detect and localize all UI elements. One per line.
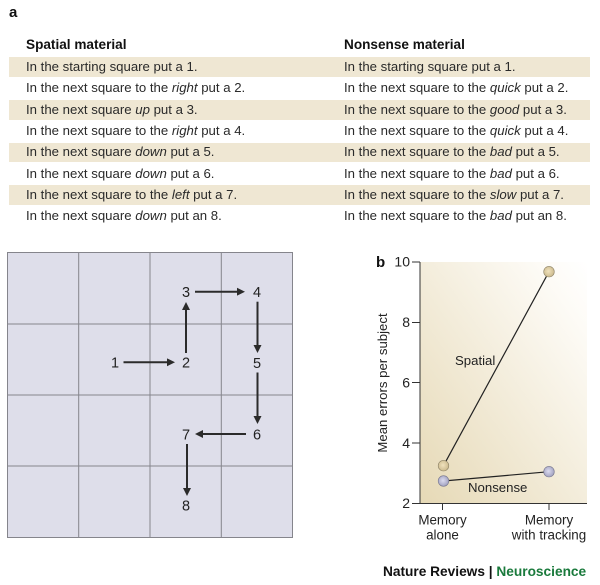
grid of squares bbox=[8, 252, 292, 538]
y axis numbers: 6 bbox=[402, 374, 410, 390]
grid numbers: 3 bbox=[182, 285, 190, 301]
grid numbers: 4 bbox=[253, 285, 261, 301]
credit line: Nature Reviews | Neuroscience bbox=[383, 564, 587, 579]
heading: spatial material: Spatial material bbox=[26, 37, 126, 52]
column: spatial material: In the next square up put a 3. bbox=[26, 102, 198, 116]
column: nonsense material: In the starting square put a 1. bbox=[344, 59, 516, 74]
grid numbers: 2 bbox=[182, 356, 190, 372]
y axis numbers: 4 bbox=[402, 435, 410, 451]
y axis title: Mean errors per subject bbox=[375, 313, 390, 453]
column: nonsense material: In the next square to the bad put a 5. bbox=[344, 144, 560, 159]
axes and ticks bbox=[412, 262, 587, 510]
x axis labels bbox=[418, 512, 586, 542]
series: nonsense: Nonsense bbox=[468, 480, 527, 495]
chart background bbox=[420, 262, 587, 503]
column: nonsense material: In the next square to the good put a 3. bbox=[344, 102, 567, 116]
column: spatial material: In the starting square put a 1. bbox=[26, 59, 198, 74]
series: nonsense bbox=[438, 466, 554, 495]
x axis labels: alone bbox=[426, 528, 459, 542]
grid numbers: 8 bbox=[182, 498, 190, 514]
grid numbers: 1 bbox=[111, 356, 119, 372]
panel label b: b bbox=[376, 254, 385, 271]
grid numbers bbox=[111, 285, 261, 514]
column: spatial material bbox=[26, 37, 245, 223]
table: instructions bbox=[9, 37, 590, 223]
column: nonsense material: In the next square to the slow put a 7. bbox=[344, 186, 564, 202]
column: spatial material: In the next square down put an 8. bbox=[26, 208, 222, 223]
panel label a: a bbox=[9, 4, 17, 21]
grid numbers: 7 bbox=[182, 428, 190, 444]
column: spatial material: In the next square down put a 6. bbox=[26, 166, 214, 180]
x axis labels: with tracking bbox=[511, 528, 586, 542]
column: nonsense material: In the next square to the quick put a 4. bbox=[344, 123, 568, 138]
x axis labels: Memory bbox=[525, 512, 573, 528]
column: spatial material: In the next square to the right put a 4. bbox=[26, 123, 245, 138]
column: spatial material: In the next square to the left put a 7. bbox=[26, 186, 237, 202]
y axis numbers: 10 bbox=[394, 254, 410, 270]
row bands bbox=[9, 57, 590, 205]
grid numbers: 5 bbox=[253, 356, 261, 372]
column: nonsense material: In the next square to the bad put an 8. bbox=[344, 208, 567, 223]
column: nonsense material: In the next square to the quick put a 2. bbox=[344, 80, 568, 95]
column: spatial material: In the next square down put a 5. bbox=[26, 144, 214, 159]
column: spatial material: In the next square to the right put a 2. bbox=[26, 80, 245, 95]
grid numbers: 6 bbox=[253, 428, 261, 444]
series: spatial bbox=[438, 266, 554, 471]
series: spatial: Spatial bbox=[455, 353, 495, 368]
y axis numbers bbox=[394, 254, 410, 511]
line chart bbox=[375, 254, 587, 542]
x axis labels: Memory bbox=[418, 512, 467, 528]
heading: nonsense material: Nonsense material bbox=[344, 37, 465, 52]
column: nonsense material bbox=[344, 37, 568, 223]
y axis numbers: 8 bbox=[402, 314, 410, 330]
y axis numbers: 2 bbox=[402, 495, 410, 511]
arrows between squares bbox=[124, 292, 258, 488]
column: nonsense material: In the next square to the bad put a 6. bbox=[344, 166, 560, 180]
